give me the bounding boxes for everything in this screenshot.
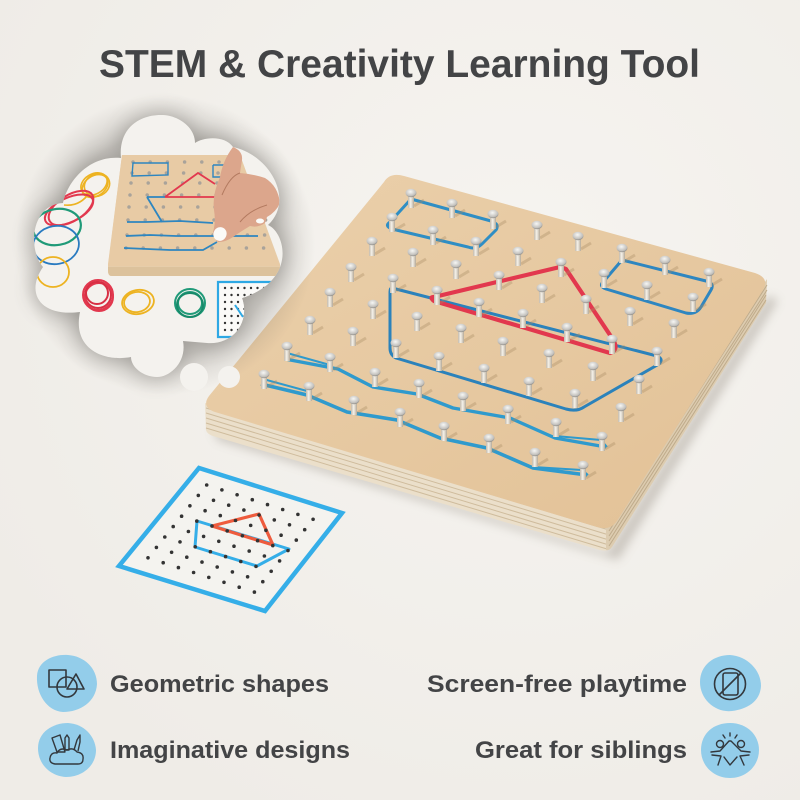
peg grid (258, 189, 722, 480)
rubber band: upper wave (285, 353, 607, 447)
worksheet dots (148, 485, 314, 592)
rubber band: top-left rectangle (387, 199, 497, 248)
feature: screen-free playtime: Screen-free playtime (427, 671, 687, 698)
mini bands (132, 163, 225, 177)
rubber band: boat hull (390, 288, 661, 410)
worksheet boat sail (212, 514, 273, 545)
board right edge (606, 279, 767, 550)
board top surface (206, 175, 765, 528)
loose rubber bands (30, 168, 205, 317)
rubber band: top-right rectangle (601, 260, 712, 313)
thought cloud with inset scene (34, 115, 283, 377)
thought bubble: large (180, 363, 208, 391)
hand placing band (211, 147, 280, 243)
worksheet boat hull (195, 521, 289, 566)
thought bubble: small (218, 366, 240, 388)
feature: imaginative designs: Imaginative designs (110, 737, 350, 764)
feature: geometric shapes: Geometric shapes (110, 671, 329, 698)
wooden geoboard (205, 175, 778, 560)
feature: great for siblings: Great for siblings (475, 737, 687, 764)
paper worksheet (119, 468, 342, 611)
feature: geometric shapes (37, 655, 329, 712)
cloud fill (34, 115, 283, 377)
board left edge (205, 403, 612, 551)
board shadow (212, 296, 778, 560)
feature: great for siblings (475, 723, 759, 778)
rubber band: boat sail (432, 267, 616, 353)
feature: screen-free playtime (427, 655, 761, 711)
mini worksheet (216, 280, 272, 338)
thought cloud shadow (15, 95, 315, 395)
mini pegs (126, 162, 278, 248)
title: STEM & Creativity Learning Tool (99, 43, 700, 86)
rubber band: lower wave (261, 379, 588, 475)
feature: imaginative designs (38, 723, 350, 777)
mini geoboard (108, 155, 280, 276)
